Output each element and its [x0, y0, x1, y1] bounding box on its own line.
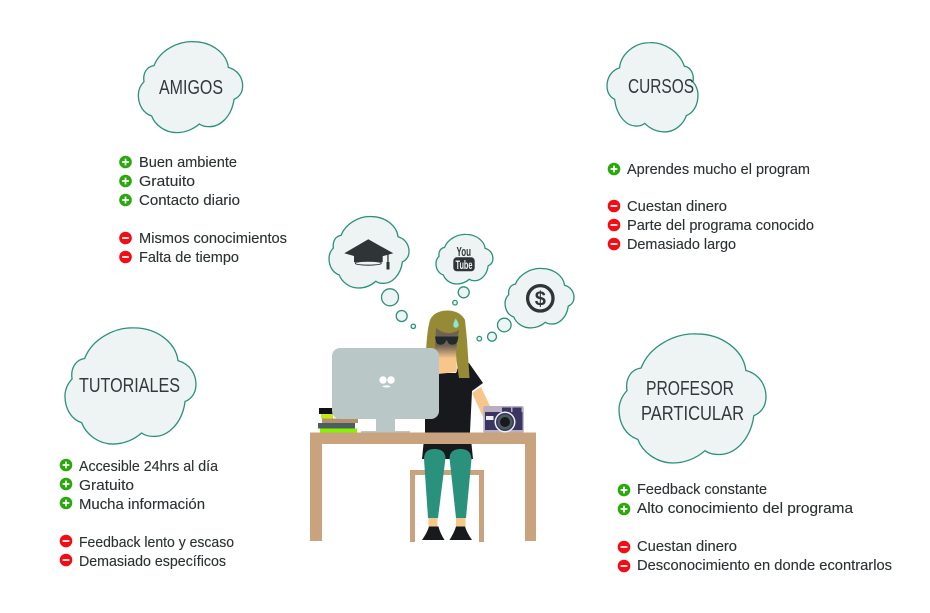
- list: tutoriales pros and cons: Demasiado específicos: [79, 554, 226, 570]
- list: profesor pros and cons: Alto conocimiento del programa: [637, 501, 854, 517]
- panel: tutoriales: [60, 328, 234, 570]
- icon: youtube: [453, 244, 475, 272]
- shirt: [423, 363, 483, 458]
- sweat drop: [453, 318, 459, 328]
- list: amigos pros and cons: Falta de tiempo: [139, 250, 239, 266]
- books: [318, 408, 358, 433]
- cloud: profesor particular: PARTICULAR: [641, 402, 744, 425]
- shirt hem under desk: [422, 444, 473, 459]
- panel: cursos: [607, 43, 814, 253]
- list: tutoriales pros and cons: Accesible 24hrs al día: [79, 459, 219, 475]
- list: cursos pros and cons: Demasiado largo: [627, 237, 736, 253]
- cloud: amigos: [138, 42, 243, 133]
- shoes: [422, 526, 472, 540]
- thought bubble: graduation cap: [329, 217, 415, 328]
- list: tutoriales pros and cons: Gratuito: [79, 478, 134, 494]
- thought bubble: money: [477, 268, 574, 341]
- face and neck: [435, 328, 459, 374]
- list: amigos pros and cons: Contacto diario: [139, 193, 240, 209]
- list: amigos pros and cons: [119, 155, 287, 266]
- hair: [426, 310, 470, 378]
- list: cursos pros and cons: Aprendes mucho el program: [627, 162, 810, 178]
- icon: youtube: Tube: [456, 258, 473, 272]
- list: profesor pros and cons: Desconocimiento en donde econtrarlos: [637, 558, 892, 574]
- sunglasses: [435, 336, 458, 345]
- monitor: [332, 348, 439, 434]
- cloud: cursos: CURSOS: [628, 75, 694, 98]
- list: profesor pros and cons: Cuestan dinero: [637, 539, 737, 555]
- list: cursos pros and cons: Parte del programa conocido: [627, 218, 814, 234]
- list: profesor pros and cons: [618, 482, 892, 574]
- legs: [424, 449, 472, 518]
- icon: graduation cap: [344, 239, 393, 270]
- list: tutoriales pros and cons: [60, 459, 234, 570]
- panel: profesor particular: [618, 334, 892, 574]
- list: profesor pros and cons: Feedback constante: [637, 482, 767, 498]
- panel: amigos: [119, 42, 287, 266]
- illustration: person at desk: [310, 310, 536, 542]
- cloud: profesor particular: [619, 334, 766, 463]
- cloud: profesor particular: PROFESOR: [646, 377, 734, 400]
- list: cursos pros and cons: [608, 162, 814, 253]
- cloud: tutoriales: TUTORIALES: [79, 374, 180, 397]
- cloud: tutoriales: [65, 328, 196, 444]
- desk: [310, 432, 536, 541]
- list: tutoriales pros and cons: Feedback lento y escaso: [79, 535, 234, 551]
- icon: dollar coin: $: [535, 288, 546, 310]
- cloud: amigos: AMIGOS: [159, 76, 223, 99]
- list: amigos pros and cons: Gratuito: [139, 174, 195, 190]
- cloud: cursos: [607, 43, 698, 132]
- thought bubble: youtube: [436, 234, 493, 305]
- list: cursos pros and cons: Cuestan dinero: [627, 199, 727, 215]
- list: amigos pros and cons: Mismos conocimientos: [139, 231, 287, 247]
- list: amigos pros and cons: Buen ambiente: [139, 155, 237, 171]
- arm: [472, 387, 490, 419]
- ankles: [428, 518, 466, 527]
- camera: [483, 406, 524, 433]
- list: tutoriales pros and cons: Mucha información: [79, 497, 205, 513]
- icon: youtube: You: [456, 244, 471, 259]
- chair: [410, 470, 484, 542]
